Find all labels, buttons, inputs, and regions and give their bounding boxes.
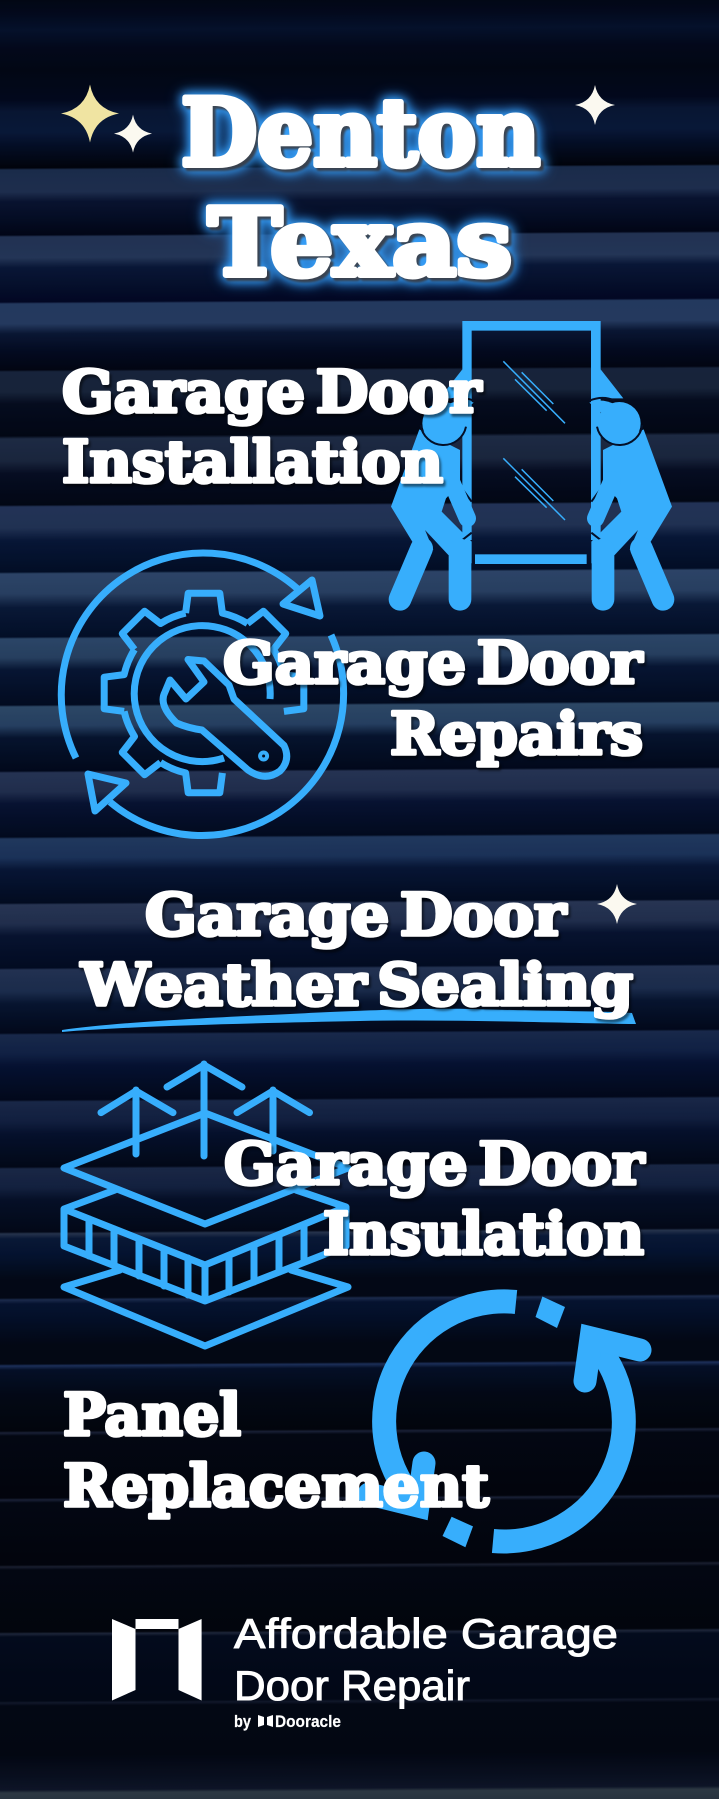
icon: replacement cycle	[369, 1296, 640, 1547]
heading: panel replacement: Replacement	[63, 1452, 489, 1520]
honeycomb slats	[89, 1219, 304, 1295]
heading: panel replacement	[63, 1381, 489, 1520]
heading: garage door installation: Installation	[62, 428, 443, 496]
logo: wordmark: by	[234, 1712, 251, 1731]
right worker	[589, 369, 672, 599]
sparkle: yellow	[61, 84, 119, 142]
dash bottom	[442, 1517, 473, 1547]
left worker	[391, 369, 474, 599]
title: Texas	[208, 188, 512, 297]
arrowhead lower left	[369, 1463, 424, 1506]
middle layer	[64, 1190, 346, 1301]
heading: garage door weather sealing: Garage Door	[145, 881, 567, 949]
heading: garage door insulation: Insulation	[323, 1200, 644, 1268]
title	[181, 78, 540, 297]
logo: wordmark: Dooracle	[275, 1712, 341, 1731]
icon: insulation layers with arrows	[64, 1064, 348, 1346]
heading: garage door installation: Garage Door	[62, 358, 482, 426]
bottom layer	[64, 1270, 348, 1346]
heading: garage door weather sealing	[80, 881, 633, 1019]
sparkle: small white	[114, 115, 152, 153]
gear inner ring	[134, 626, 270, 762]
icon: gear and wrench with cycle arrows	[61, 553, 344, 836]
heading: garage door repairs: Garage Door	[223, 629, 643, 697]
cycle arc lower	[110, 635, 344, 836]
arrowhead lower	[88, 774, 126, 811]
top layer	[64, 1113, 348, 1224]
cycle arc left	[384, 1301, 516, 1506]
cycle arc upper	[61, 553, 301, 758]
heading: garage door weather sealing: Weather Sealing	[80, 951, 633, 1019]
sparkle: top right	[575, 85, 615, 125]
heat arrows	[101, 1064, 310, 1156]
heading: panel replacement: Panel	[63, 1381, 241, 1449]
arrowhead upper right	[585, 1338, 640, 1381]
gear outline	[103, 592, 305, 793]
heading: garage door insulation: Garage Door	[224, 1130, 645, 1198]
arrowhead upper	[283, 580, 320, 616]
wrench	[163, 660, 287, 776]
heading: garage door repairs: Repairs	[390, 700, 643, 768]
dash top	[536, 1296, 565, 1328]
logo: wordmark: Door Repair	[234, 1662, 470, 1709]
heading: garage door installation	[62, 358, 482, 496]
underline brush stroke	[62, 1009, 636, 1032]
title: Denton	[181, 78, 540, 187]
logo: door mark	[112, 1619, 202, 1700]
icon: workers carrying door	[391, 321, 672, 599]
heading: garage door repairs	[223, 629, 643, 768]
sparkle: middle right	[597, 884, 637, 924]
cycle arc right	[493, 1338, 624, 1541]
heading: garage door insulation	[224, 1130, 645, 1268]
glass highlights	[503, 361, 565, 520]
logo: wordmark	[234, 1610, 618, 1731]
door frame	[462, 321, 601, 564]
logo: wordmark: Affordable Garage	[234, 1610, 618, 1657]
